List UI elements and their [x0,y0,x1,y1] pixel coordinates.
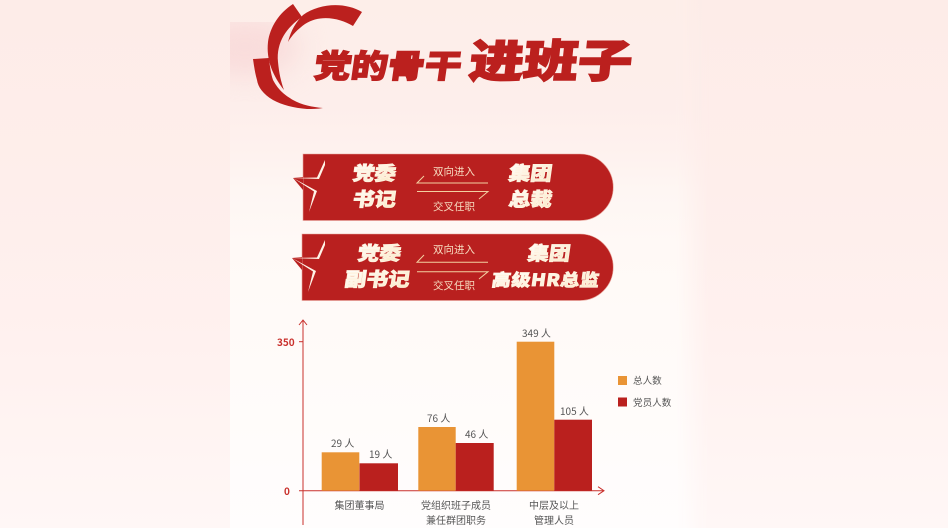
group: party organization team members: 46 人 [465,426,488,441]
axis labels [277,334,295,498]
icon: star 2 [292,240,325,292]
banner 2 right text: 高级HR总监 [490,267,601,292]
banner 2 left text [343,238,412,292]
banner 1 right text: 总裁 [507,184,554,212]
group: board of directors: 19 人 [369,446,392,461]
axis labels: 350 [277,334,295,349]
banner 2 arrows and captions: 双向进入 [433,242,475,257]
banner 1 left text: 党委 [351,158,398,186]
banner 1 left text [351,158,398,212]
banner 1 arrows and captions: 双向进入 [433,164,475,179]
chart axes [299,320,604,525]
group: party organization team members: 兼任群团职务 [426,512,486,527]
group: middle management and above: 105 人 [560,403,589,418]
banner 2: deputy secretary and senior HR director [292,234,613,300]
group: middle management and above: 中层及以上 [529,497,579,512]
bar chart [277,320,672,527]
legend: 总人数 [633,373,662,387]
banner 1 right text [507,158,554,212]
legend: 党员人数 [633,395,672,409]
group: party organization team members: 党组织班子成员 [421,497,491,512]
group: middle management and above [517,325,592,527]
banner 1: party secretary and group president [293,154,613,220]
group: party organization team members: 76 人 [427,410,450,425]
banner 2 left text: 副书记 [343,264,412,292]
group: board of directors: 集团董事局 [334,497,384,512]
icon: star 1 [293,160,325,212]
banner 1 arrows and captions [417,164,488,214]
title text [312,26,636,90]
banner 1 right text: 集团 [507,158,554,186]
group: party organization team members [418,410,494,527]
legend [618,373,672,409]
title text: 党的骨干 [312,41,465,87]
background panel [230,191,682,462]
group: middle management and above: 349 人 [522,325,551,340]
group: middle management and above: 管理人员 [534,512,574,527]
background tint behind logo [230,22,297,78]
title logo: red arcs [253,4,362,109]
banner 2 arrows and captions: 交叉任职 [433,278,475,293]
axis labels: 0 [284,483,290,498]
banner 2 right text: 集团 [526,237,573,266]
group: board of directors [322,435,398,512]
banner 2 arrows and captions [417,242,488,293]
banner 1 left text: 书记 [351,184,398,212]
banner 1 arrows and captions: 交叉任职 [433,199,475,214]
group: board of directors: 29 人 [331,435,354,450]
banner 2 left text: 党委 [356,238,403,266]
banner 2 right text [490,237,601,292]
title text: 进班子 [467,26,636,90]
